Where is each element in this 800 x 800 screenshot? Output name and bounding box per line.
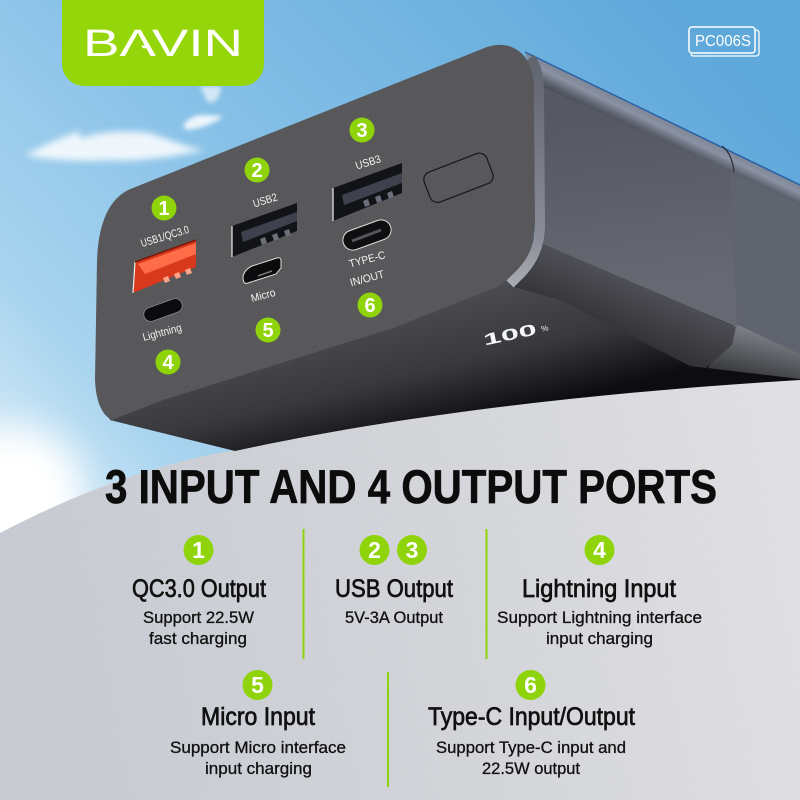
panel: Micro input: Micro Input <box>201 703 315 731</box>
panel: Type-C input/output: 6 <box>524 672 537 698</box>
face grain <box>95 45 535 420</box>
panel: Type-C input/output <box>428 670 635 778</box>
clouds <box>25 86 223 161</box>
port number badges: 6 <box>364 295 376 317</box>
panel: Micro input: 5 <box>251 672 264 698</box>
power bank <box>95 45 800 451</box>
logo panel <box>62 0 264 86</box>
port labels: USB3 <box>354 153 382 172</box>
panel: Type-C input/output: 22.5W output <box>482 759 580 778</box>
port labels: USB1/QC3.0 <box>139 224 191 250</box>
metal bezel <box>510 58 540 284</box>
dark under glass panel <box>510 243 736 368</box>
port number badges: 4 <box>162 352 174 374</box>
dividers <box>302 529 488 787</box>
panel: Lightning input: Support Lightning interface <box>497 608 702 627</box>
model badge <box>689 27 759 56</box>
display: % <box>540 323 549 334</box>
wall surface <box>0 378 800 800</box>
port: Type-C <box>340 217 394 253</box>
panel: QC3.0 output <box>132 535 266 648</box>
port labels: Micro <box>250 287 277 305</box>
port number badges: 2 <box>251 160 263 182</box>
display <box>482 322 549 349</box>
title: 3 INPUT AND 4 OUTPUT PORTS <box>105 460 717 513</box>
panel: Micro input: Support Micro interface <box>170 738 346 757</box>
port labels <box>139 153 387 344</box>
blue top edge <box>525 52 800 185</box>
panel: QC3.0 output: QC3.0 Output <box>132 575 266 603</box>
panel: USB output: 2 <box>368 537 381 563</box>
panel: Lightning input: input charging <box>546 629 653 648</box>
port labels: TYPE-C <box>348 249 387 271</box>
panel: Lightning input: 4 <box>593 537 606 563</box>
panel: Lightning input <box>497 535 702 648</box>
port labels: USB2 <box>252 192 279 210</box>
panel: USB output: USB Output <box>335 575 453 603</box>
power button <box>421 151 495 205</box>
port number badges <box>152 118 382 374</box>
panel: Type-C input/output: Support Type-C input and <box>436 738 626 757</box>
port labels: IN/OUT <box>349 269 386 289</box>
port: USB1 QC3.0 red <box>133 240 196 293</box>
panel: QC3.0 output: Support 22.5W <box>143 608 254 627</box>
port: Lightning <box>142 297 184 323</box>
strip joint <box>722 146 734 172</box>
port number badges: 1 <box>158 198 170 220</box>
panel: QC3.0 output: 1 <box>192 537 205 563</box>
side glass panel <box>541 85 737 327</box>
lower right metal reflection <box>708 322 800 379</box>
port: USB2 <box>232 203 297 257</box>
panel: Micro input <box>170 670 346 778</box>
underside of power bank <box>100 235 800 451</box>
port number badges: 3 <box>356 120 368 142</box>
port: Micro <box>243 258 281 283</box>
right side panel <box>728 170 800 354</box>
panel: Micro input: input charging <box>205 759 312 778</box>
port number badges: 5 <box>262 320 274 342</box>
top metal strip <box>525 52 800 204</box>
display: 100 <box>482 322 538 349</box>
panel: QC3.0 output: fast charging <box>149 629 247 648</box>
port: USB3 <box>333 163 402 221</box>
model badge: PC006S <box>695 33 751 50</box>
front face <box>95 45 535 420</box>
panel: Type-C input/output: Type-C Input/Output <box>428 703 635 731</box>
panel: USB output <box>335 535 453 627</box>
panel: USB output: 3 <box>406 537 418 563</box>
logo panel: BAVIN <box>83 23 243 65</box>
panel: USB output: 5V-3A Output <box>345 608 443 627</box>
port labels: Lightning <box>141 322 183 344</box>
panel: Lightning input: Lightning Input <box>522 575 676 603</box>
